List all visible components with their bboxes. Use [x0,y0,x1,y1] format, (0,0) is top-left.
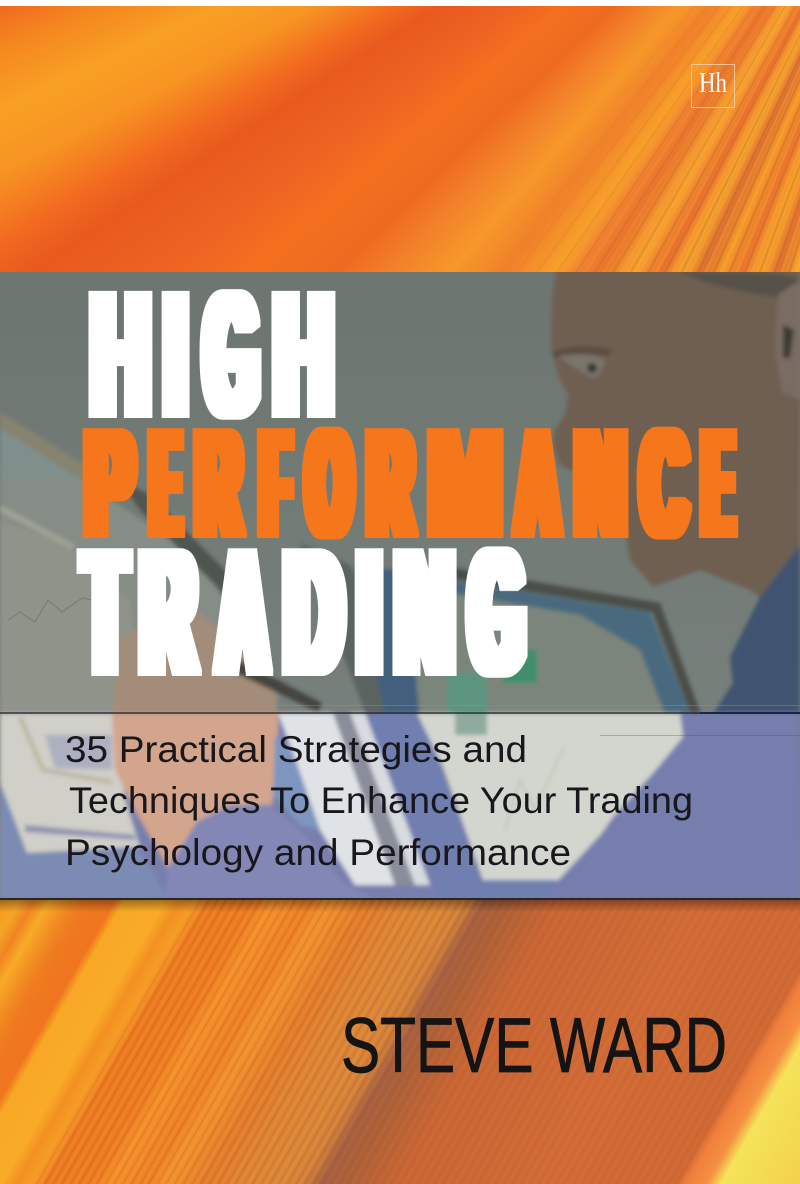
title: PERFORMANCE: C [642,398,686,567]
title: PERFORMANCE: R [368,398,412,567]
pillar behind hand [300,544,385,712]
title: TRADING: A [219,513,266,711]
lower left blue area [0,796,164,898]
sleeve cuff [165,805,375,899]
man's head [551,265,800,597]
subtitle band [0,713,800,899]
right sleeve [558,836,601,883]
hand in band [112,713,278,868]
subtitle: Techniques To Enhance Your Trading [69,780,693,821]
title: TRADING: T [85,513,125,711]
publisher logo [692,64,734,108]
hand above band [112,613,278,714]
title: HIGH: G [205,257,257,453]
top panel: orange streak background [0,6,800,272]
top panel: fine streak texture [556,6,800,272]
title: TRADING: D [285,513,342,711]
title: HIGH: I [165,257,186,453]
title: PERFORMANCE: P [86,398,133,567]
title: TRADING: N [396,513,453,711]
upper shirt [713,545,800,714]
subtitle: Psychology and Performance [65,832,571,873]
title: PERFORMANCE: M [429,398,501,567]
cover artwork: H [275,257,332,453]
title: PERFORMANCE: O [308,398,351,567]
title: TRADING: I [359,513,380,711]
subtitle: 35 Practical Strategies and [65,729,527,770]
photo panel: trader at monitors [0,265,800,900]
title: PERFORMANCE: N [576,398,625,567]
subtitle [65,729,693,873]
right monitor [416,594,646,710]
left monitor screen [0,428,76,479]
title: PERFORMANCE: E [152,398,179,567]
band bottom edge and shadow [0,898,800,900]
right monitor screen in band [417,713,683,880]
left chart screen [0,713,140,853]
title: HIGH: H [92,257,149,453]
window strip [278,713,395,885]
title: PERFORMANCE: A [517,398,558,567]
bottom panel: orange streak background [0,900,800,1184]
title: PERFORMANCE: F [262,398,289,567]
title: PERFORMANCE: R [196,398,240,567]
pen [237,658,323,712]
cover artwork: G [471,513,523,711]
chart scribble on left monitor [8,598,92,622]
publisher logo: Hh [699,68,727,99]
title: TRADING: R [142,513,194,711]
